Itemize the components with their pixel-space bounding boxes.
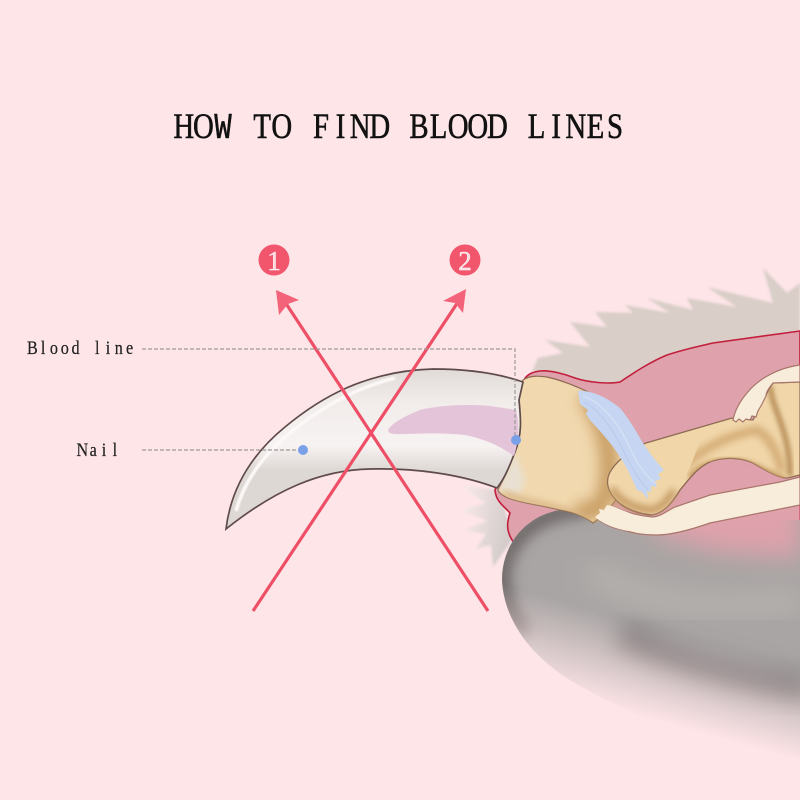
number badge 2 xyxy=(450,244,480,276)
blood line area xyxy=(388,405,518,456)
distal bone right shadow xyxy=(575,395,609,512)
pad left shadow xyxy=(502,508,590,635)
distal bone xyxy=(498,376,650,523)
label: nail: Nail xyxy=(77,439,117,460)
claw xyxy=(226,369,523,529)
number badge 2: 2 xyxy=(458,246,472,276)
paw illustration xyxy=(458,268,800,758)
main toe bone xyxy=(608,382,800,515)
lower fur xyxy=(458,485,512,567)
knob overlay xyxy=(608,440,710,515)
skin xyxy=(495,331,800,600)
blue tendon xyxy=(578,391,664,499)
lower tendon frayed end xyxy=(595,505,632,531)
pad lower dark band xyxy=(620,635,800,692)
bone joint shading xyxy=(770,386,790,476)
paw pad xyxy=(502,490,800,758)
distal bone tip highlight xyxy=(498,452,525,495)
number badge 1: 1 xyxy=(267,246,281,276)
blood line leader xyxy=(142,349,521,445)
bone lower shading xyxy=(690,461,785,480)
pad highlight xyxy=(609,580,777,608)
pad top blend xyxy=(632,490,800,558)
nail body xyxy=(226,369,523,529)
upper fur xyxy=(530,268,800,390)
lower tendon xyxy=(595,477,800,535)
joint cap xyxy=(733,365,800,422)
bone shaft shading xyxy=(680,430,782,472)
label: blood line: Blood line xyxy=(27,337,133,358)
number badge 1 xyxy=(258,244,290,276)
nail highlight xyxy=(236,378,395,511)
arrow 1 xyxy=(276,290,488,611)
nail leader xyxy=(142,445,308,455)
arrow 2 xyxy=(253,289,466,611)
title: HOW TO FIND BLOOD LINES xyxy=(173,107,623,149)
